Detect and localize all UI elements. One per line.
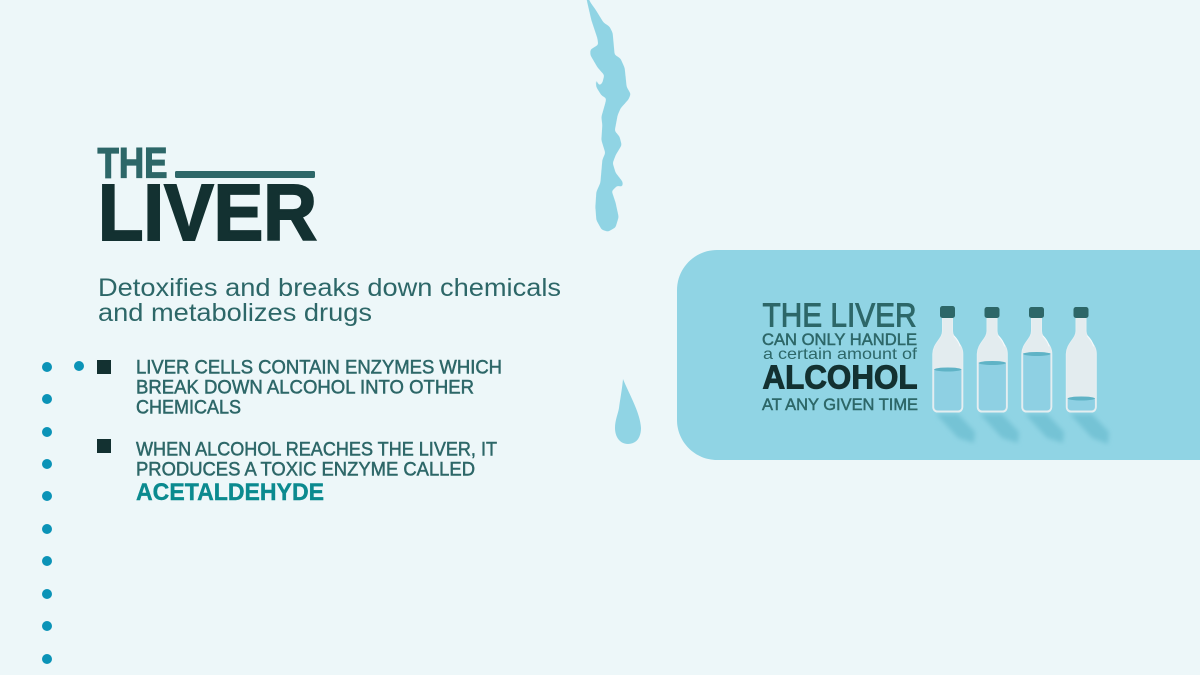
- panel background: [677, 250, 1200, 460]
- panel text: THE LIVER: [762, 296, 916, 334]
- panel: alcohol capacity: [677, 250, 1200, 460]
- bullet 2: WHEN ALCOHOL REACHES THE LIVER, IT: [136, 440, 497, 460]
- panel text: ALCOHOL: [762, 358, 918, 396]
- title: THE LIVER: LIVER: [98, 168, 317, 257]
- bullet 1: BREAK DOWN ALCOHOL INTO OTHER: [136, 378, 474, 398]
- bullet 1: LIVER CELLS CONTAIN ENZYMES WHICH: [136, 358, 502, 378]
- bottle 3: [1022, 307, 1052, 412]
- bullet list: [97, 358, 502, 506]
- subtitle: [98, 274, 561, 327]
- bottle 4: [1066, 307, 1096, 412]
- dotted line: [42, 361, 84, 664]
- panel text: [762, 296, 918, 414]
- bullet 1: [97, 358, 502, 418]
- bullet 2: ACETALDEHYDE: [136, 479, 324, 506]
- panel text: AT ANY GIVEN TIME: [762, 395, 918, 414]
- subtitle: and metabolizes drugs: [98, 299, 372, 327]
- bullet 2: PRODUCES A TOXIC ENZYME CALLED: [136, 460, 475, 480]
- panel text: CAN ONLY HANDLE: [762, 330, 917, 349]
- panel text: a certain amount of: [763, 346, 918, 363]
- liquid stream: [586, 0, 630, 231]
- bottle 1: [933, 306, 963, 412]
- bullet 1: CHEMICALS: [136, 398, 241, 418]
- liquid drop: [615, 379, 641, 444]
- bullet 2: [97, 439, 497, 506]
- bottle shadows: [936, 414, 1109, 444]
- bottle 2: [977, 307, 1007, 412]
- title: THE LIVER: THE: [98, 140, 168, 188]
- subtitle: Detoxifies and breaks down chemicals: [98, 274, 561, 302]
